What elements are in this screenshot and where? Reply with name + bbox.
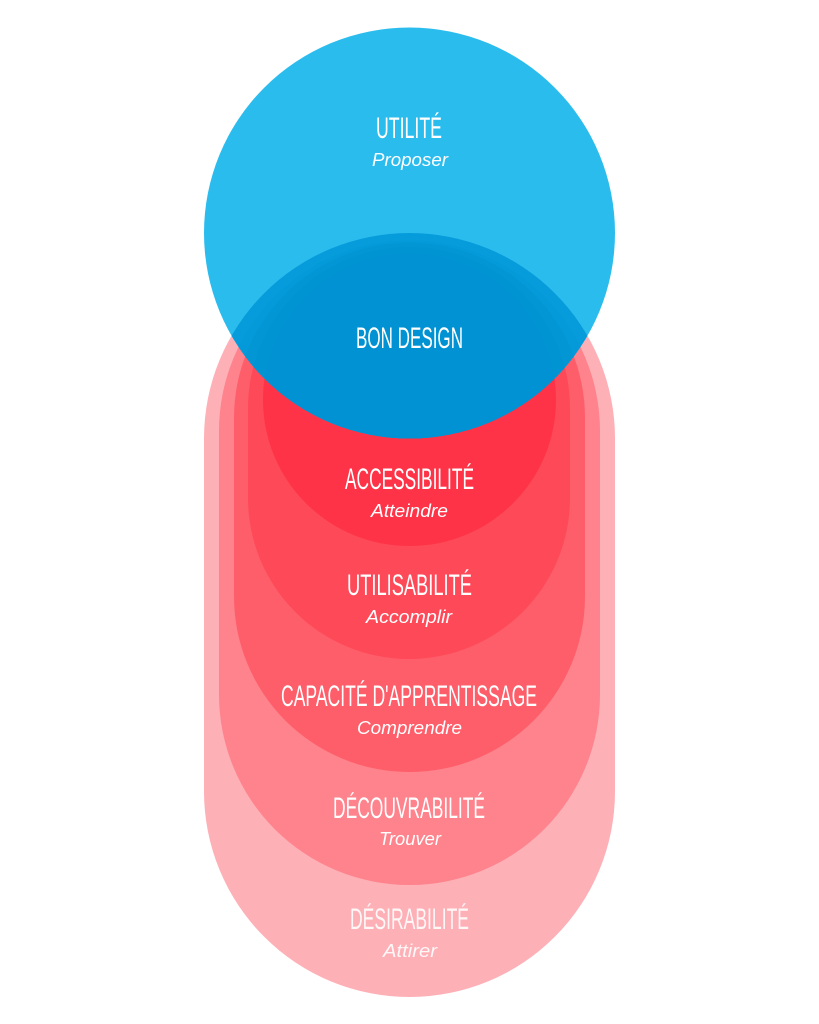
panel: accessibilité circle (263, 254, 556, 546)
panel: désirabilité stadium (204, 233, 615, 997)
text: utilité: UTILITÉ (376, 112, 442, 145)
text: découvrabilité: Trouver (379, 829, 442, 849)
text: utilité: Proposer (372, 150, 449, 170)
panel: overlap good design (232, 233, 588, 438)
text: capacité d'apprentissage: Comprendre (357, 718, 462, 738)
panel: utilisabilité stadium (248, 247, 570, 659)
text: accessibilité: ACCESSIBILITÉ (345, 463, 474, 496)
text: désirabilité: DÉSIRABILITÉ (350, 903, 469, 936)
text: accessibilité (345, 463, 474, 521)
text: utilisabilité (347, 569, 472, 627)
text: bon design: BON DESIGN (356, 322, 463, 355)
panel: capacité d'apprentissage stadium (234, 242, 585, 772)
text: désirabilité: Attirer (382, 941, 438, 961)
venn diagram: good design (204, 28, 615, 997)
panel: utilité circle (204, 28, 615, 438)
text: accessibilité: Atteindre (370, 501, 448, 521)
text: désirabilité (350, 903, 469, 961)
text: capacité d'apprentissage: CAPACITÉ D'APPRENTISSAGE (281, 680, 537, 713)
text: utilisabilité: UTILISABILITÉ (347, 569, 472, 602)
text: capacité d'apprentissage (281, 680, 537, 738)
text: découvrabilité: DÉCOUVRABILITÉ (333, 792, 485, 825)
text: utilité (372, 112, 449, 170)
panel: découvrabilité stadium (219, 240, 600, 885)
text: utilisabilité: Accomplir (365, 607, 453, 627)
text: découvrabilité (333, 792, 485, 849)
